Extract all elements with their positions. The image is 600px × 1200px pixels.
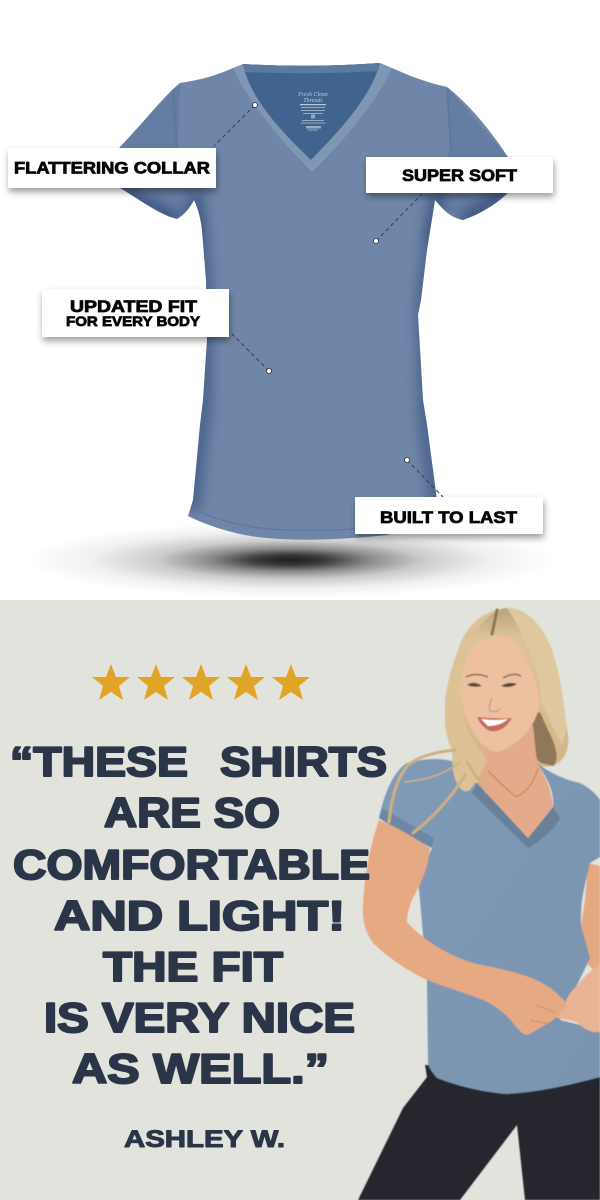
quote: “THESE xyxy=(10,738,188,785)
inner neck xyxy=(243,63,380,160)
t-shirt xyxy=(119,63,508,540)
sleeve tone xyxy=(120,83,194,219)
left arm and hand xyxy=(363,820,567,1035)
facial features xyxy=(466,674,521,731)
callout: updated fit: FOR EVERY BODY xyxy=(66,313,201,329)
callout: updated fit xyxy=(42,289,272,374)
callout: flattering collar xyxy=(8,102,258,188)
sleeve seams xyxy=(173,88,177,150)
hem stitching xyxy=(191,508,360,530)
neck and chest xyxy=(477,725,553,838)
collar xyxy=(472,783,560,848)
floor shadow xyxy=(25,522,555,598)
neck back band xyxy=(243,63,380,73)
collar band xyxy=(233,63,392,172)
loose hair strands xyxy=(389,610,497,833)
hair front xyxy=(445,608,507,791)
neck tag: Fresh Clean xyxy=(297,92,328,98)
right arm xyxy=(581,863,600,975)
woman photo illustration xyxy=(358,608,600,1200)
quote: ARE SO xyxy=(104,789,280,836)
attribution: ASHLEY W. xyxy=(124,1126,285,1153)
neck tag: Threads xyxy=(303,98,323,104)
callout: updated fit: UPDATED FIT xyxy=(70,297,198,316)
jeans xyxy=(358,1065,600,1200)
side and underarm shading xyxy=(120,190,505,510)
callout: super soft xyxy=(366,157,553,244)
sleeve cuff xyxy=(379,808,434,848)
necklace xyxy=(488,768,538,797)
quote: COMFORTABLE xyxy=(13,841,370,888)
face xyxy=(460,636,540,752)
quote: SHIRTS xyxy=(220,738,387,785)
shirt xyxy=(379,759,600,1094)
callout: built to last: BUILT TO LAST xyxy=(380,508,518,527)
quote: AS WELL.” xyxy=(72,1045,329,1092)
callout: built to last xyxy=(355,458,543,534)
star rating xyxy=(92,664,310,700)
quote: THE FIT xyxy=(103,943,283,990)
finger creases xyxy=(530,1005,555,1024)
quote: AND LIGHT! xyxy=(54,892,345,939)
callout: super soft: SUPER SOFT xyxy=(402,166,518,185)
panel: product showcase xyxy=(4,63,558,593)
callout: flattering collar: FLATTERING COLLAR xyxy=(14,158,210,178)
quote: IS VERY NICE xyxy=(44,994,355,1041)
panel: customer review xyxy=(0,600,600,1200)
dark hair shadow behind neck xyxy=(531,712,557,766)
hair back xyxy=(445,608,568,775)
neck tag xyxy=(297,92,328,130)
quote xyxy=(10,738,387,1092)
right hand xyxy=(557,963,600,1032)
